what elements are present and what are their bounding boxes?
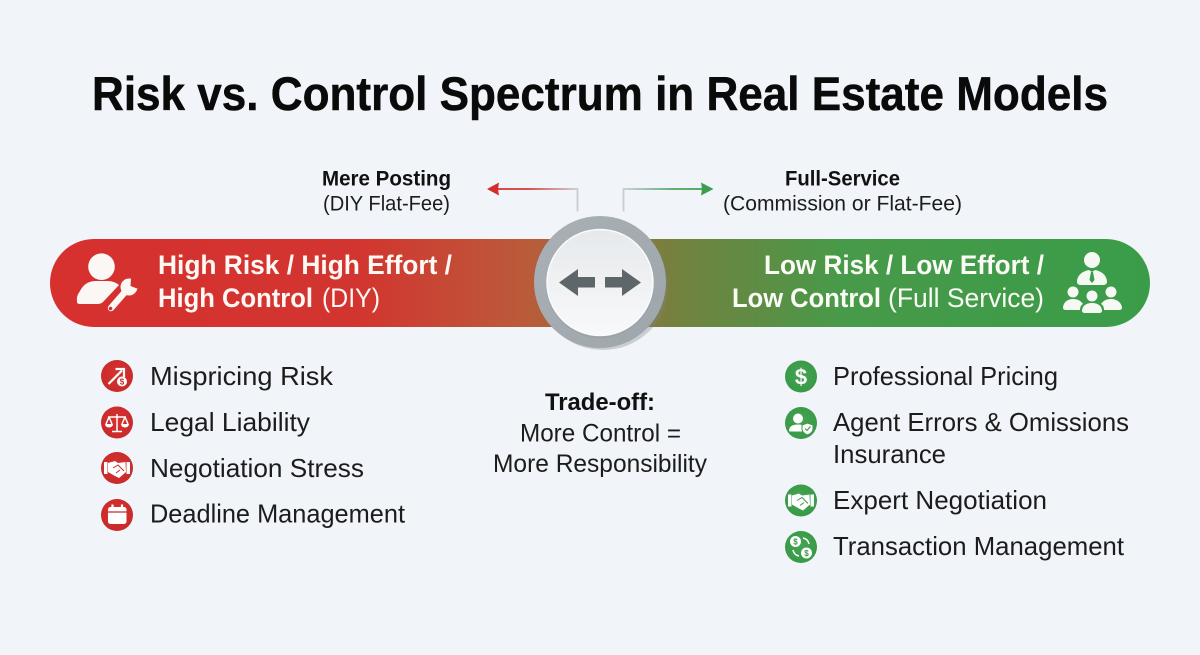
- bar text: high risk: (DIY): [322, 283, 380, 313]
- text: trade-off: More Responsibility: [493, 450, 707, 478]
- item: transaction management: $: [793, 538, 798, 546]
- title: Risk vs. Control Spectrum in Real Estate Models: [92, 67, 1108, 120]
- item: expert negotiation: Expert Negotiation: [833, 485, 1047, 515]
- item: transaction management: Transaction Management: [833, 531, 1125, 561]
- label: Mere Posting: (DIY Flat-Fee): [323, 192, 450, 216]
- label: Full-Service: [723, 168, 962, 216]
- bar text: high risk: High Control: [158, 283, 313, 313]
- item: transaction management: $: [804, 549, 809, 558]
- item: negotiation stress: Negotiation Stress: [150, 453, 364, 483]
- icon: double arrow: [559, 269, 641, 296]
- bar text: low risk: Low Control: [732, 283, 881, 313]
- bar text: high risk: [158, 250, 453, 313]
- arrow: toward full service: [624, 182, 714, 212]
- label: Full-Service: (Commission or Flat-Fee): [723, 192, 962, 216]
- text: trade-off: [493, 389, 707, 478]
- label: Full-Service: Full-Service: [785, 168, 900, 190]
- item: agent errors and omissions insurance: [785, 407, 1129, 469]
- icon: agent with clients: [1063, 252, 1122, 313]
- item: agent errors and omissions insurance: Insurance: [833, 439, 946, 469]
- wrench: [111, 292, 125, 308]
- text: trade-off: Trade-off:: [545, 389, 655, 416]
- bar text: low risk: (Full Service): [888, 283, 1044, 313]
- bar text: low risk: Low Risk / Low Effort /: [764, 250, 1045, 280]
- text: trade-off: More Control =: [520, 420, 681, 448]
- arrow: toward DIY: [487, 182, 578, 212]
- center dial: [534, 216, 668, 350]
- icon: person with wrench: [77, 253, 141, 310]
- item: mispricing risk: $: [120, 378, 125, 386]
- list: benefits: [785, 360, 1129, 563]
- item: deadline management: Deadline Management: [150, 498, 406, 528]
- bar text: high risk: High Risk / High Effort /: [158, 250, 453, 280]
- label: Mere Posting: [322, 168, 451, 216]
- label: Mere Posting: Mere Posting: [322, 168, 451, 190]
- item: professional pricing: $: [795, 364, 807, 390]
- spectrum bar: [50, 239, 1150, 327]
- bar text: low risk: [732, 250, 1045, 313]
- item: professional pricing: Professional Pricing: [833, 361, 1058, 391]
- list: risks: [101, 360, 406, 531]
- item: legal liability: Legal Liability: [150, 407, 310, 437]
- item: mispricing risk: Mispricing Risk: [150, 361, 334, 391]
- item: agent errors and omissions insurance: Agent Errors & Omissions: [833, 407, 1129, 437]
